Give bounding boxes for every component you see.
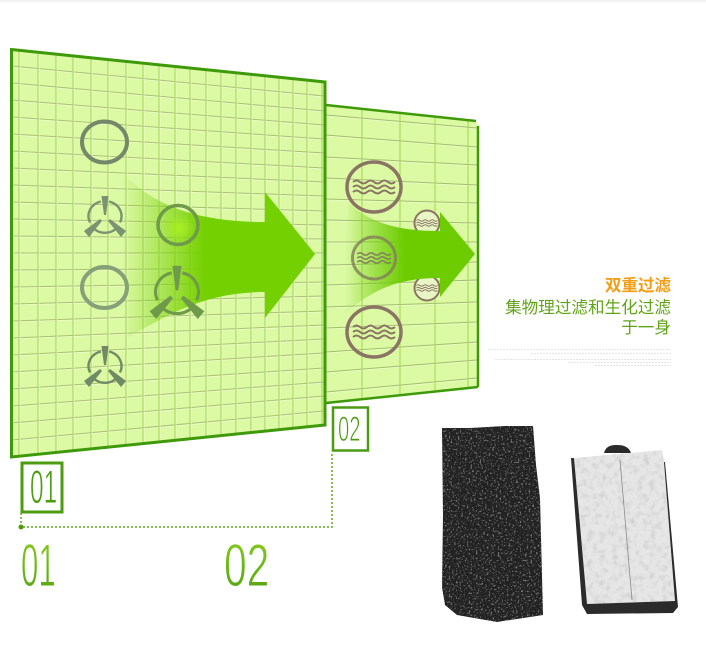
icon: fan bottom (84, 346, 126, 387)
panel 2 border (326, 105, 478, 403)
arrow glow (163, 214, 195, 242)
cartridge handle (604, 445, 631, 453)
panel 2 grid (326, 109, 477, 399)
icon: wave circle middle (352, 237, 396, 279)
description text: 集物理过滤和生化过滤 (505, 298, 671, 317)
description text: 于一身 (621, 318, 671, 337)
icon: fan upper (84, 196, 126, 237)
top edge shading (0, 0, 706, 4)
panel 1 grid (12, 50, 324, 456)
photo: black foam sponge (442, 426, 543, 622)
dotted connector (18, 452, 332, 530)
icon: wave circle bottom (347, 307, 401, 357)
icon: wave circle top (347, 162, 401, 212)
cartridge filter media (574, 450, 675, 604)
panel: second filter layer (326, 105, 479, 403)
cartridge seam (620, 460, 632, 600)
icon: fan on arrow (150, 266, 204, 319)
panel 1 surface (11, 49, 325, 457)
description text (505, 298, 671, 337)
panel 2 surface (326, 105, 479, 403)
panel: first filter layer (11, 49, 325, 457)
icon: circle on arrow (158, 206, 198, 244)
panel 1 border (12, 50, 325, 457)
label box 02: 02 (338, 410, 361, 450)
icon: circle top (82, 122, 127, 162)
heading: 双重过滤 (605, 276, 672, 295)
label box 02 (333, 408, 368, 450)
number 01: 01 (21, 533, 56, 600)
arrow: second layer (340, 203, 475, 318)
label box 01: 01 (30, 460, 57, 513)
icon: circle lower (82, 267, 127, 308)
label box 01 (22, 460, 62, 513)
cartridge body (571, 458, 678, 614)
icon: small wave circle upper (414, 210, 440, 236)
number 02: 02 (224, 532, 269, 599)
photo: filter cartridge (571, 445, 678, 614)
arrow: first layer (117, 167, 315, 338)
icon: small wave circle lower (414, 276, 440, 300)
fine print lines (488, 350, 671, 366)
